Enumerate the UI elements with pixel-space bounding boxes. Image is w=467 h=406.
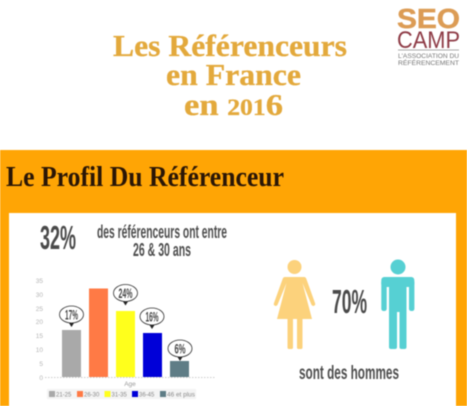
- chart legend: 46 et plus: [167, 392, 195, 398]
- chart legend: 31-35: [112, 392, 128, 398]
- chart legend: 21-25: [56, 392, 72, 398]
- callout: 6%: [168, 340, 192, 361]
- y axis labels: 0: [39, 375, 43, 382]
- bar: 31-35: [116, 311, 135, 377]
- bar chart: age distribution: [36, 278, 215, 399]
- logo: SEO Camp: CAMP: [397, 27, 460, 54]
- y axis labels: 15: [36, 333, 43, 340]
- heading: section title: Le Profil Du Référenceur: [6, 162, 284, 193]
- title: en 2016: [184, 87, 283, 122]
- panel: white content area: [9, 213, 456, 406]
- icon: woman: [274, 260, 315, 349]
- logo: SEO Camp: [397, 3, 460, 67]
- title: Les Référenceurs: [113, 28, 347, 63]
- callout: 16%: [140, 308, 164, 329]
- text block: age statement: des référenceurs ont entre: [97, 222, 227, 242]
- callout: 16%: 16%: [146, 308, 159, 324]
- y axis labels: 35: [36, 278, 43, 285]
- y axis labels: 5: [39, 361, 43, 368]
- icon: man: [381, 260, 414, 349]
- bar: 26-30: [89, 288, 108, 377]
- y axis labels: 25: [36, 306, 43, 313]
- text block: age statement: [97, 222, 227, 260]
- chart legend: 26-30: [84, 392, 100, 398]
- y axis labels: [36, 278, 43, 382]
- callout: 17%: [60, 306, 84, 327]
- chart legend: 36-45: [139, 392, 155, 398]
- logo: SEO Camp: L'ASSOCIATION DU: [398, 53, 459, 60]
- stat: 32%: 32%: [40, 219, 76, 256]
- text block: age statement: 26 & 30 ans: [133, 240, 191, 260]
- bar: 36-45: [143, 333, 162, 377]
- callout: 17%: 17%: [65, 306, 78, 322]
- logo: SEO Camp: SEO: [397, 3, 460, 34]
- text block: gender statement: sont des hommes: [299, 363, 399, 384]
- callout: 6%: 6%: [174, 340, 186, 356]
- callout: 24%: [114, 284, 138, 306]
- y axis labels: 30: [36, 292, 43, 299]
- stat: 70%: 70%: [332, 283, 367, 320]
- title: [113, 28, 347, 122]
- panel: orange section background: [0, 150, 467, 406]
- bar: 21-25: [62, 330, 81, 377]
- axis title: Age: [124, 381, 136, 388]
- logo: SEO Camp: RÉFÉRENCEMENT: [398, 60, 459, 67]
- title: en France: [166, 57, 301, 92]
- callout: 24%: 24%: [118, 285, 133, 301]
- y axis labels: 20: [36, 319, 43, 326]
- chart legend: [47, 389, 196, 399]
- bar: 46 et plus: [170, 361, 189, 377]
- y axis labels: 10: [36, 347, 43, 354]
